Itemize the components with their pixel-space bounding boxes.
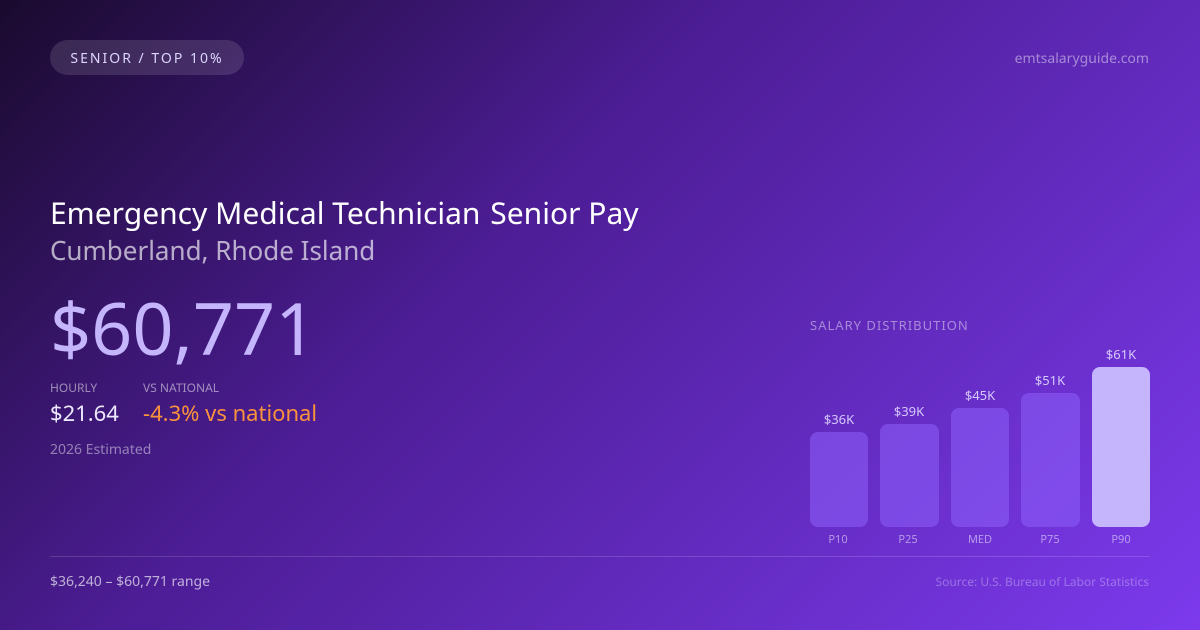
bar P90 highlighted xyxy=(1092,367,1150,527)
axis label P25: P25 xyxy=(898,532,918,547)
value P90: $61K xyxy=(1106,345,1136,363)
bar median xyxy=(951,408,1009,527)
value P75: $51K xyxy=(1035,371,1065,389)
hourly value: $21.64 xyxy=(50,398,119,428)
chart: salary distribution xyxy=(810,316,1150,547)
bar P75 xyxy=(1021,393,1080,527)
hourly label: HOURLY xyxy=(50,379,97,396)
value P10: $36K xyxy=(824,410,854,428)
site name: emtsalaryguide.com xyxy=(1015,49,1149,68)
axis label P90: P90 xyxy=(1111,532,1131,547)
axis label P75: P75 xyxy=(1040,532,1060,547)
subtitle: location: Cumberland, Rhode Island xyxy=(50,232,375,268)
title: Emergency Medical Technician Senior Pay xyxy=(50,192,639,233)
axis label P10: P10 xyxy=(828,532,848,547)
stat: versus national xyxy=(143,379,317,428)
source credit: Source: U.S. Bureau of Labor Statistics xyxy=(936,573,1149,590)
chart heading: SALARY DISTRIBUTION xyxy=(810,316,969,334)
bar P25 xyxy=(880,424,939,527)
badge: senior / top 10%: SENIOR / TOP 10% xyxy=(70,49,224,68)
vs national value: -4.3% vs national xyxy=(143,398,317,428)
badge: senior / top 10% xyxy=(50,40,244,75)
stat: hourly xyxy=(50,379,119,428)
bar P10 xyxy=(810,432,868,527)
main salary figure: $60,771 xyxy=(50,279,316,377)
value median: $45K xyxy=(965,386,995,404)
value P25: $39K xyxy=(894,402,924,420)
axis label median: MED xyxy=(968,532,992,547)
vs national label: VS NATIONAL xyxy=(143,379,219,396)
data year note: 2026 Estimated xyxy=(50,440,151,459)
salary range: $36,240 – $60,771 range xyxy=(50,572,210,591)
